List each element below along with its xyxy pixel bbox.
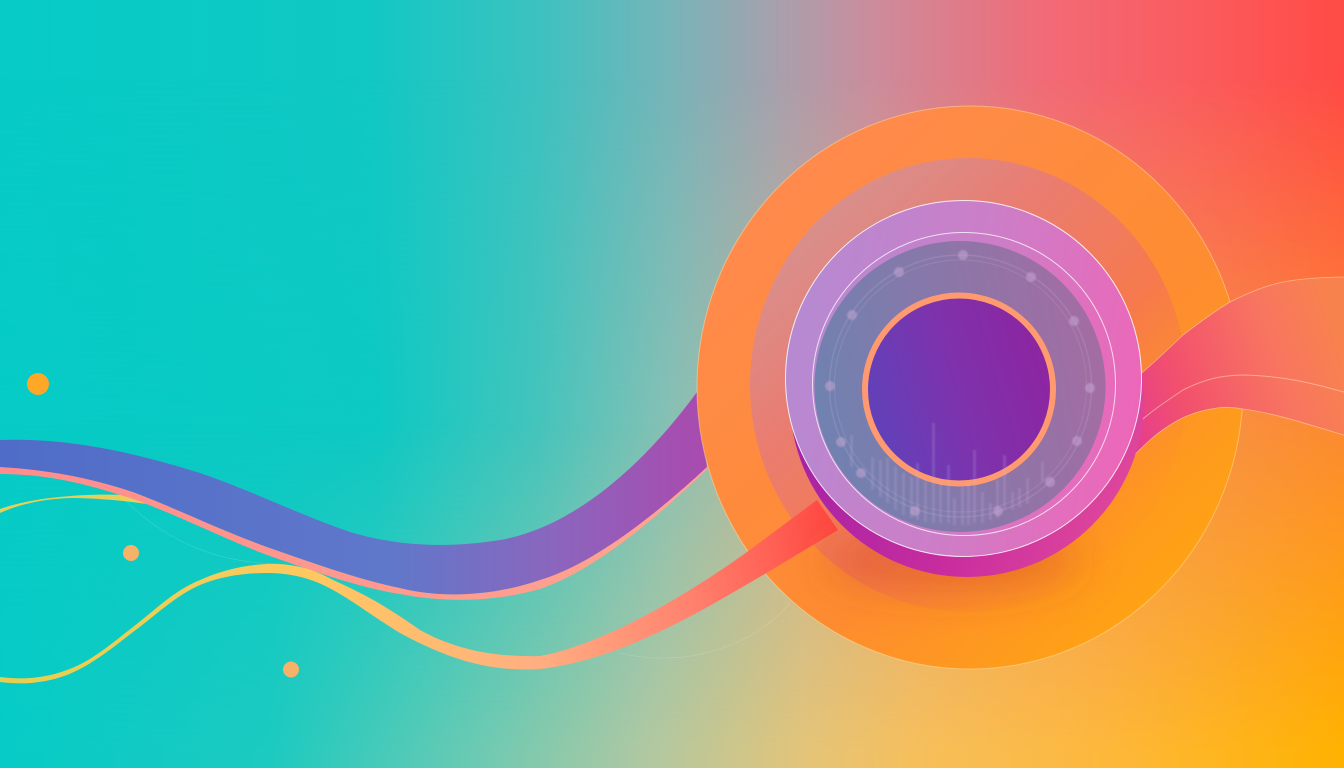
magenta under disc bbox=[790, 223, 1144, 577]
right ribbon inner line bbox=[1136, 375, 1344, 425]
ribbon blue body bbox=[0, 392, 707, 594]
ribbon salmon edge bbox=[0, 465, 707, 600]
decorative dot middle bbox=[123, 545, 139, 561]
pink disc bbox=[786, 200, 1142, 556]
decorative dot lower bbox=[283, 662, 299, 678]
faint bar chart bbox=[850, 423, 1044, 525]
decorative dot large bbox=[27, 373, 49, 395]
disc drop shadow bbox=[820, 530, 1080, 590]
dial flower markers bbox=[825, 250, 1095, 516]
grey-violet dial bbox=[814, 241, 1106, 532]
flowing wave ribbon yellow to red bbox=[0, 500, 838, 683]
thin yellow curve upper left bbox=[0, 495, 172, 513]
second coral ring bbox=[750, 158, 1187, 612]
central purple circle bbox=[865, 296, 1053, 484]
dial faint ring bbox=[830, 255, 1092, 517]
faint hairline curves bbox=[125, 500, 790, 658]
outer orange ring bbox=[697, 106, 1243, 669]
right ribbon bbox=[1120, 277, 1344, 465]
white inner outline bbox=[812, 232, 1116, 536]
right ribbon body bbox=[1120, 277, 1344, 465]
purple-blue ribbon bbox=[0, 392, 707, 600]
